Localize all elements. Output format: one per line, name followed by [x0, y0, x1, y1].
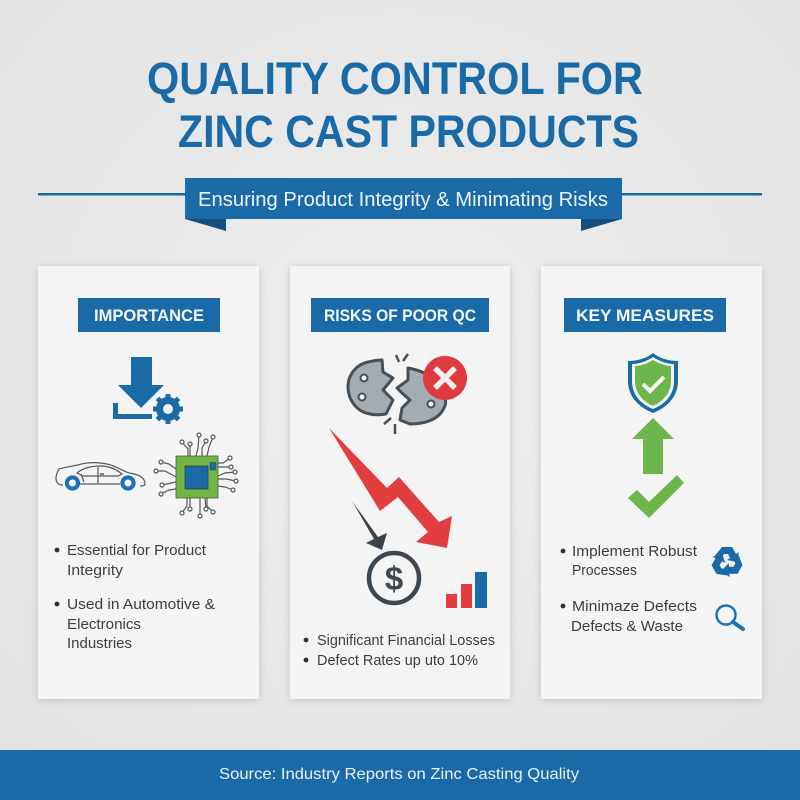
- footer bar: [0, 750, 800, 800]
- panel: importance: [38, 266, 259, 699]
- text: measure bullets: Minimaze Defects: [572, 599, 697, 615]
- heading: importance: [78, 298, 220, 332]
- text: importance bullets: [55, 543, 215, 652]
- text: measure bullets: [561, 544, 697, 635]
- icon: green up arrow: [632, 418, 674, 474]
- icon: cracked part with red cross: [348, 354, 467, 434]
- icon: download arrow with gear: [113, 357, 183, 424]
- text: measure bullets: Processes: [572, 563, 637, 579]
- icon: dollar coin: $: [385, 560, 403, 597]
- title: ZINC CAST PRODUCTS: [178, 106, 639, 157]
- text: risk bullets: Significant Financial Losses: [317, 633, 495, 649]
- heading: key measures: KEY MEASURES: [576, 306, 714, 325]
- text: measure bullets: Implement Robust: [572, 544, 697, 560]
- icon: green check: [628, 475, 684, 518]
- subtitle ribbon: [185, 178, 622, 231]
- heading: importance: IMPORTANCE: [94, 306, 204, 325]
- icon: falling red arrow: [329, 428, 452, 548]
- text: importance bullets: Integrity: [67, 563, 124, 579]
- title: [147, 53, 643, 157]
- text: risk bullets: Defect Rates up uto 10%: [317, 653, 478, 669]
- footer bar: Source: Industry Reports on Zinc Casting Quality: [219, 766, 579, 783]
- icon: recycle: [708, 547, 746, 581]
- text: importance bullets: Used in Automotive &: [67, 597, 215, 613]
- heading: risks of poor QC: RISKS OF POOR QC: [324, 306, 476, 325]
- icon: dark arrow: [352, 501, 387, 550]
- icon: magnifier: [716, 606, 743, 629]
- heading: risks of poor QC: [311, 298, 489, 332]
- title: QUALITY CONTROL FOR: [147, 53, 643, 104]
- text: measure bullets: Defects & Waste: [571, 619, 683, 635]
- icon: dollar coin: [369, 553, 419, 603]
- icon: circuit chip: [154, 433, 238, 518]
- icon: shield with check: [628, 353, 678, 413]
- text: risk bullets: [304, 633, 495, 669]
- icon: small bar chart: [446, 572, 487, 608]
- icon: car: [56, 463, 145, 490]
- text: importance bullets: Essential for Product: [67, 543, 206, 559]
- text: importance bullets: Industries: [67, 636, 132, 652]
- panel: risks of poor QC: [290, 266, 510, 699]
- subtitle ribbon: Ensuring Product Integrity & Minimating Risks: [198, 189, 608, 211]
- text: importance bullets: Electronics: [67, 617, 141, 633]
- panel: key measures: [541, 266, 762, 699]
- heading: key measures: [564, 298, 726, 332]
